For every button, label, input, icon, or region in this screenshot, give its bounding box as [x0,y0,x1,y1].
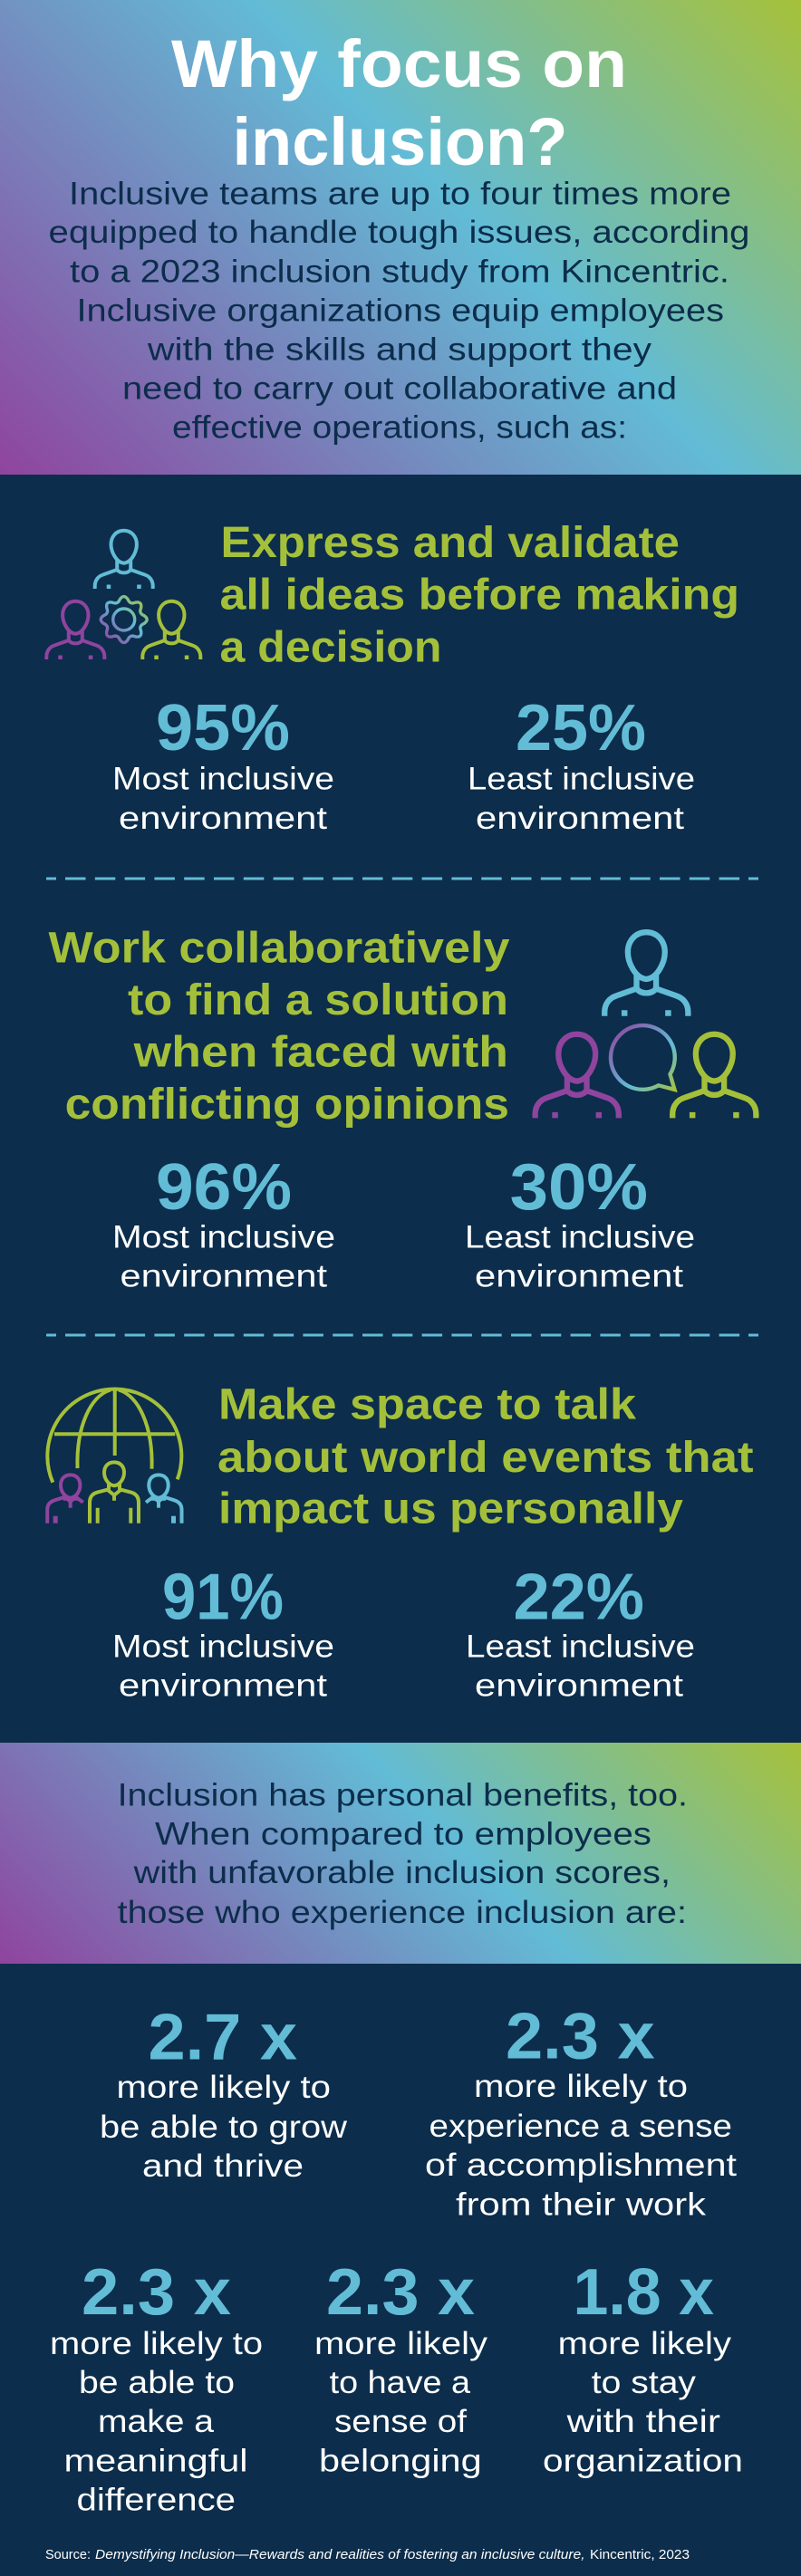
stat: 2.3x belonging: sense of [334,2404,467,2439]
heading: express and validate: Express and validate [221,519,680,567]
stat: 2.3x meaningful difference: more likely to [50,2326,263,2361]
stat: 95% most inclusive [112,692,334,836]
heading: express and validate [219,519,739,672]
icon part: blue person [146,1475,181,1523]
stat: 1.8x stay with organization: more likely [558,2326,732,2361]
stat: 91% most inclusive: 91% [162,1561,284,1633]
panel: work collaboratively [49,925,756,1294]
stat: 25% least inclusive: environment [476,801,684,836]
stat: 2.3x accomplishment [425,2000,737,2223]
stat: 2.3x belonging [314,2256,488,2478]
heading: work collaboratively: to find a solution [128,976,508,1024]
stat: 2.7x grow and thrive: 2.7 x [149,2002,297,2074]
personal benefits text block: those who experience inclusion are: [118,1895,687,1930]
stat: 2.3x meaningful difference: difference [76,2482,236,2518]
stat: 2.3x accomplishment: of accomplishment [425,2148,737,2183]
stat: 22% least inclusive: environment [475,1668,683,1704]
stat: 22% least inclusive: 22% [513,1561,644,1633]
icon part: green person [142,601,200,659]
heading: make space to talk: about world events that [217,1434,754,1482]
heading: work collaboratively [49,925,510,1129]
personal benefits text block: When compared to employees [155,1817,651,1852]
panel: make space to talk [47,1381,754,1704]
title: inclusion? [232,104,567,179]
stat: 1.8x stay with organization: 1.8 x [573,2256,714,2329]
stat: 22% least inclusive: Least inclusive [466,1629,695,1664]
stat: 2.3x meaningful difference [50,2256,263,2518]
stat: 96% most inclusive: 96% [156,1151,292,1224]
source citation: Kincentric, 2023 [590,2548,690,2562]
heading: work collaboratively: Work collaboratively [49,925,510,973]
icon: three people with gear [46,531,200,659]
icon part: globe [47,1389,181,1483]
icon: three people with speech bubble [536,932,756,1118]
intro text block: equipped to handle tough issues, according [49,215,749,250]
stat: 96% most inclusive: Most inclusive [112,1219,335,1254]
stat: 2.3x belonging: 2.3 x [326,2256,475,2329]
stat: 30% least inclusive: Least inclusive [465,1219,695,1254]
stat: 95% most inclusive: environment [119,801,327,836]
stat: 2.7x grow and thrive [100,2002,348,2184]
icon part: blue person [95,531,153,589]
panel: benefit statistics [50,2000,743,2518]
panel: personal benefits gradient band [0,1743,801,1964]
heading: make space to talk: impact us personally [218,1485,683,1533]
intro text block: with the skills and support they [147,332,652,368]
heading: make space to talk [217,1381,754,1533]
stat: 2.3x belonging: more likely [314,2326,488,2361]
intro text block: Inclusive teams are up to four times more [69,176,731,212]
stat: 2.3x belonging: belonging [319,2444,482,2478]
icon part: purple person [47,1475,83,1523]
stat: 91% most inclusive: environment [119,1668,327,1704]
title: Why focus on [171,26,627,101]
stat: 95% most inclusive: Most inclusive [112,762,334,797]
icon part: purple person [536,1034,619,1118]
title [171,26,627,179]
panel: intro gradient header [0,0,801,475]
intro text block [49,176,749,446]
stat: 96% most inclusive [112,1151,335,1294]
personal benefits text block [118,1778,688,1930]
heading: express and validate: all ideas before making [219,572,739,620]
stat: 91% most inclusive: Most inclusive [112,1629,334,1664]
stat: 30% least inclusive: environment [475,1259,683,1294]
stat: 30% least inclusive: 30% [510,1151,648,1224]
stat: 1.8x stay with organization: to stay [592,2365,697,2400]
intro text block: to a 2023 inclusion study from Kincentric. [70,254,729,290]
stat: 2.3x meaningful difference: 2.3 x [82,2256,231,2329]
icon part: blue person [604,932,688,1016]
stat: 22% least inclusive [466,1561,695,1704]
icon part: speech bubble [611,1025,675,1090]
intro text block: Inclusive organizations equip employees [76,293,724,328]
heading: make space to talk: Make space to talk [218,1381,636,1429]
stat: 2.3x meaningful difference: be able to [79,2365,235,2400]
stat: 2.3x accomplishment: 2.3 x [506,2000,655,2072]
heading: work collaboratively: when faced with [133,1029,508,1077]
stat: 96% most inclusive: environment [120,1259,327,1294]
stat: 2.7x grow and thrive: more likely to [116,2070,331,2105]
stat: 2.7x grow and thrive: be able to grow [100,2110,348,2145]
personal benefits text block: with unfavorable inclusion scores, [133,1855,671,1890]
stat: 2.7x grow and thrive: and thrive [142,2148,304,2184]
icon part: purple person [46,601,104,659]
stat: 2.3x accomplishment: experience a sense [429,2109,732,2144]
icon part: gear [101,597,147,642]
heading: express and validate: a decision [219,624,442,672]
icon part: green person [672,1034,756,1118]
heading: work collaboratively: conflicting opinions [65,1081,509,1129]
stat: 1.8x stay with organization [543,2256,743,2478]
stat: 91% most inclusive [112,1561,334,1704]
stat: 25% least inclusive: Least inclusive [468,762,695,797]
icon: globe with three people [47,1389,181,1523]
stat: 1.8x stay with organization: with their [565,2404,720,2439]
intro text block: need to carry out collaborative and [122,371,677,406]
panel: express and validate ideas [46,519,739,836]
stat: 2.3x accomplishment: from their work [456,2187,707,2223]
stat: 25% least inclusive: 25% [516,692,646,764]
intro text block: effective operations, such as: [172,409,627,446]
source citation: Demystifying Inclusion—Rewards and realities of fostering an inclusive culture, [95,2548,585,2562]
stat: 2.3x meaningful difference: meaningful [63,2444,248,2478]
stat: 2.3x belonging: to have a [330,2365,471,2400]
stat: 1.8x stay with organization: organization [543,2444,743,2478]
personal benefits text block: Inclusion has personal benefits, too. [118,1778,688,1813]
stat: 2.3x meaningful difference: make a [98,2404,215,2439]
source citation: Source: [45,2548,91,2562]
stat: 25% least inclusive [468,692,695,836]
stat: 30% least inclusive [465,1151,695,1294]
icon part: green person [90,1462,139,1523]
stat: 95% most inclusive: 95% [156,692,290,764]
stat: 2.3x accomplishment: more likely to [474,2069,688,2104]
